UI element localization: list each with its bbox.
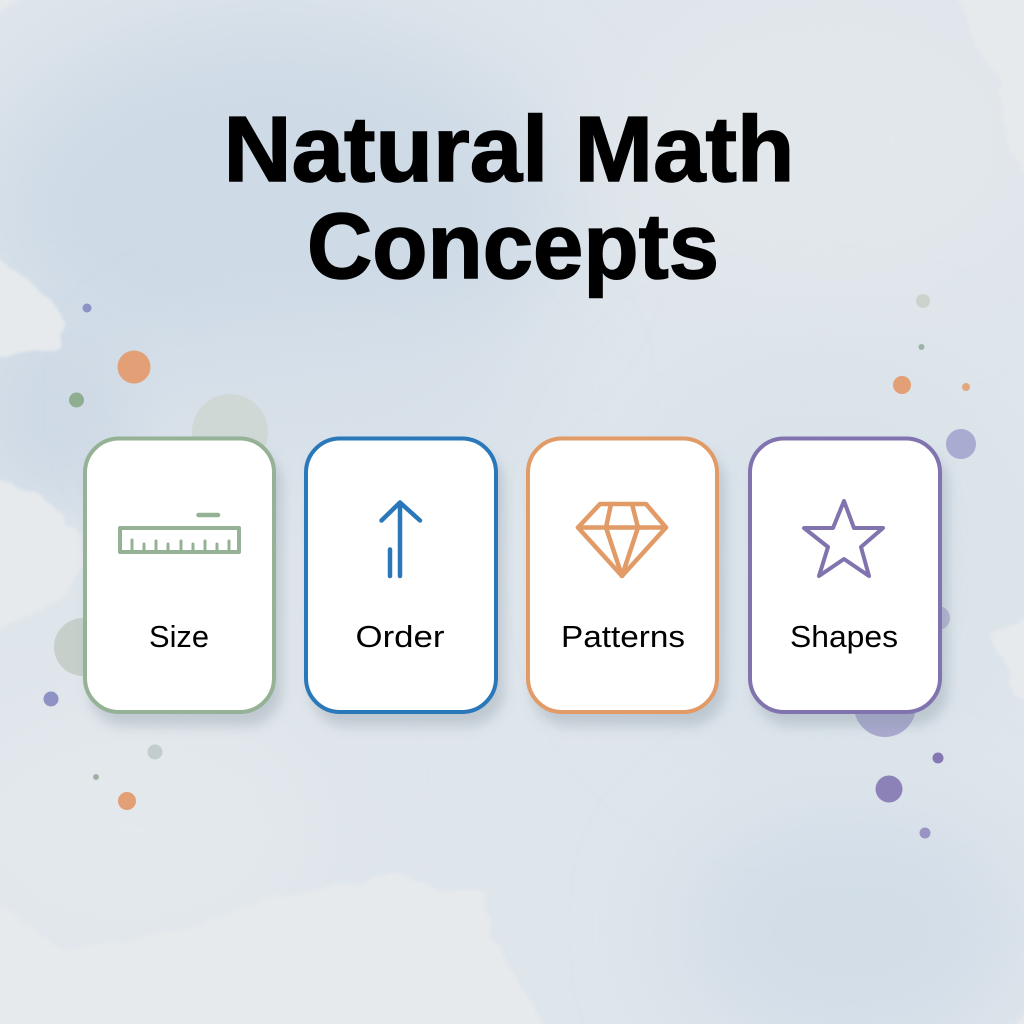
icon: diamond <box>578 504 666 576</box>
decorative dots: left cluster <box>44 304 268 810</box>
icon: ruler <box>120 515 239 552</box>
icon: star <box>804 501 883 576</box>
title: Natural Math <box>224 97 794 201</box>
panel: size <box>85 438 274 712</box>
panel: patterns <box>528 438 717 712</box>
label: patterns: Patterns <box>561 619 685 654</box>
title: Concepts <box>307 194 719 298</box>
label: size: Size <box>149 619 209 654</box>
panel: shapes <box>750 438 940 712</box>
label: order: Order <box>356 619 444 654</box>
title <box>224 97 794 298</box>
icon: arrow up <box>382 502 420 576</box>
label: shapes: Shapes <box>790 619 898 654</box>
decorative dots: right cluster <box>854 294 976 838</box>
panel: order <box>306 438 496 712</box>
